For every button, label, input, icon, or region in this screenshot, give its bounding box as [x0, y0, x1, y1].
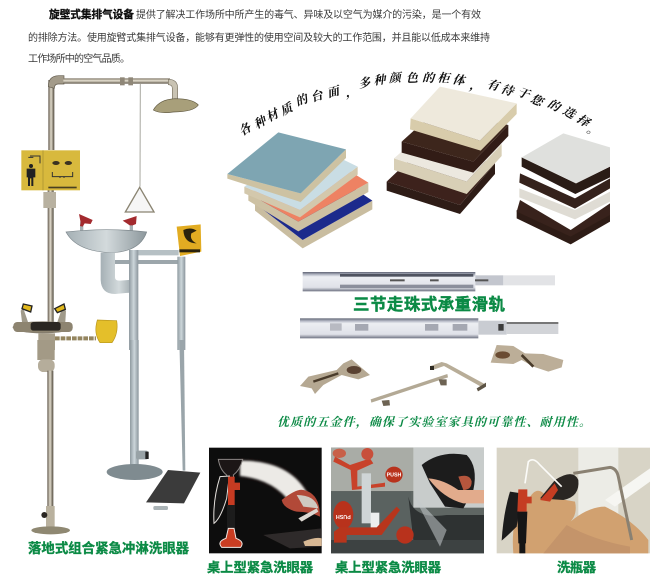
- yellow safety sign: [21, 150, 80, 190]
- curved caption about worktops: 台: [309, 87, 327, 105]
- pull rod and triangle handle: [125, 84, 154, 212]
- small yellow push plate: [96, 320, 117, 343]
- curved caption about worktops: 待: [499, 82, 517, 99]
- shower pipe: [48, 76, 178, 323]
- curved caption about worktops: 种: [251, 112, 270, 132]
- curved caption about worktops: 于: [515, 85, 532, 102]
- caption: desktop eyewash 2: 桌上型紧急洗眼器: [335, 559, 442, 575]
- hardware: hinges and handles: [300, 345, 563, 406]
- eye wash bowl on shower unit: [13, 304, 96, 350]
- photo: eyewash in use with PUSH sign: PUSH: [387, 473, 402, 479]
- curved caption about worktops: 颜: [387, 70, 403, 85]
- curved caption about worktops: 种: [373, 72, 388, 88]
- coloured stack: [227, 132, 372, 248]
- intro heading: 旋壁式集排气设备: [49, 8, 134, 21]
- handle bar: [371, 374, 448, 406]
- pedal rod: [179, 340, 185, 471]
- lower slide rail: [300, 318, 558, 338]
- red valve handles: [79, 214, 137, 235]
- product photos: [209, 448, 650, 553]
- curved caption about worktops: 的: [422, 71, 437, 85]
- floor-standing emergency shower and eyewash unit: [13, 76, 198, 350]
- curved caption about worktops: 多: [357, 75, 372, 91]
- intro line 2: 的排除方法。使用旋臂式集排气设备，能够有更弹性的使用空间及较大的工作范围，并且能以低成本来维持: [28, 31, 490, 44]
- post and base: [107, 340, 163, 480]
- hardware caption: 优质的五金件，确保了实验室家具的可靠性、耐用性。: [277, 415, 591, 429]
- foot pedal: [146, 470, 200, 503]
- worktop material samples: [227, 87, 610, 248]
- drawer slides: [300, 272, 558, 338]
- curved caption about worktops: ，: [468, 78, 483, 94]
- curved caption about worktops: [236, 70, 602, 141]
- curved caption about worktops: 的: [545, 96, 564, 115]
- bowl drain pipe: [101, 253, 137, 294]
- upper slide rail: [303, 272, 555, 291]
- curved caption about worktops: 色: [406, 71, 419, 85]
- photo: desktop eyewash on dark background: [209, 448, 322, 553]
- curved caption about worktops: 体: [452, 72, 468, 88]
- caption: floor-standing combined emergency shower eyewash: 落地式组合紧急冲淋洗眼器: [28, 540, 190, 556]
- curved caption about worktops: 各: [236, 120, 255, 139]
- curved caption about worktops: 有: [485, 77, 503, 94]
- photo: bottle washer in hand: [497, 448, 650, 553]
- curved caption about worktops: 面: [325, 83, 342, 100]
- hinge left: [300, 359, 370, 394]
- intro line 1: 提供了解决工作场所中所产生的毒气、异味及以空气为媒介的污染，是一个有效: [136, 8, 481, 21]
- white and dark stack: [517, 133, 610, 244]
- support bars: [115, 250, 185, 350]
- pipe bracket: [43, 192, 56, 208]
- lower shower pipe and base: [31, 340, 70, 534]
- cream and brown stack: [387, 87, 517, 214]
- intro text block: [28, 8, 490, 65]
- curved caption about worktops: 质: [278, 100, 296, 118]
- curved caption about worktops: 选: [560, 103, 579, 123]
- curved caption about worktops: ，: [344, 84, 358, 100]
- curved caption about worktops: 您: [528, 92, 547, 110]
- freestanding eyewash with bowl and foot pedal: [66, 214, 201, 350]
- photo: eyewash in use with PUSH sign: [331, 448, 484, 553]
- curved caption about worktops: 的: [293, 91, 312, 109]
- shower head: [153, 99, 198, 113]
- yellow push sign: [177, 224, 201, 256]
- hinge right: [491, 345, 563, 372]
- long handle: [430, 362, 486, 391]
- steel bowl: [66, 230, 147, 253]
- eyewash lower post, base and pedal: [107, 340, 200, 510]
- slide rail caption: 三节走珠式承重滑轨: [353, 294, 506, 314]
- curved caption about worktops: 。: [584, 123, 602, 141]
- caption: desktop eyewash 1: 桌上型紧急洗眼器: [207, 559, 314, 575]
- curved caption about worktops: 材: [264, 106, 282, 124]
- curved caption about worktops: 柜: [437, 70, 452, 86]
- photo: eyewash in use with PUSH sign: PUSH: [336, 513, 351, 519]
- intro line 3: 工作场所中的空气品质。: [28, 52, 130, 65]
- curved caption about worktops: 择: [574, 112, 594, 131]
- caption: bottle washer: 洗瓶器: [557, 560, 597, 575]
